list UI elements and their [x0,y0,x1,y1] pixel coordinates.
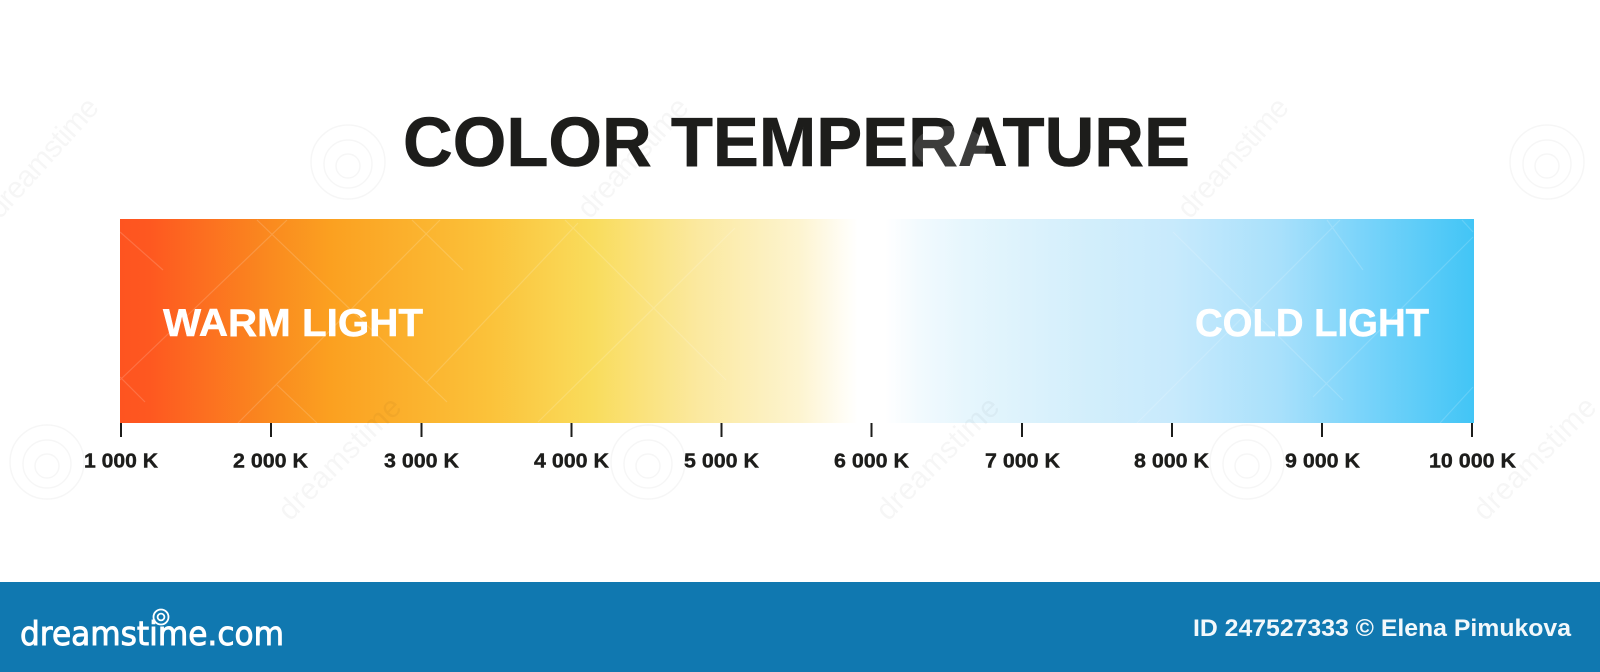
infographic canvas: dreamstime [1467,390,1600,527]
label: warm light: WARM LIGHT [163,302,423,345]
footer credit: ID 247527333 © Elena Pimukova [1193,615,1572,642]
icon: logo spiral [154,610,168,624]
tick labels: 2 000 K [233,450,309,472]
label: cold light: COLD LIGHT [1195,302,1429,345]
tick labels [84,450,1517,472]
tick labels: 10 000 K [1429,450,1517,472]
infographic canvas: dreamstime [870,390,1006,527]
tick marks [121,423,1472,437]
infographic canvas: dreamstime [272,390,408,527]
tick labels: 4 000 K [534,450,610,472]
gradient bar [120,219,1474,423]
temperature scale [84,423,1517,472]
infographic canvas: dreamstime [1171,91,1296,225]
tick labels: 7 000 K [985,450,1061,472]
tick labels: 6 000 K [834,450,910,472]
tick labels: 5 000 K [684,450,760,472]
tick labels: 9 000 K [1285,450,1361,472]
footer logo: dreamstime.com: dreamstime.com [20,614,284,653]
tick labels: 1 000 K [84,450,159,472]
tick labels: 3 000 K [384,450,460,472]
footer band [0,582,1600,672]
infographic canvas: dreamstime [571,91,696,225]
title: COLOR TEMPERATURE [403,103,1190,181]
tick labels: 8 000 K [1134,450,1210,472]
